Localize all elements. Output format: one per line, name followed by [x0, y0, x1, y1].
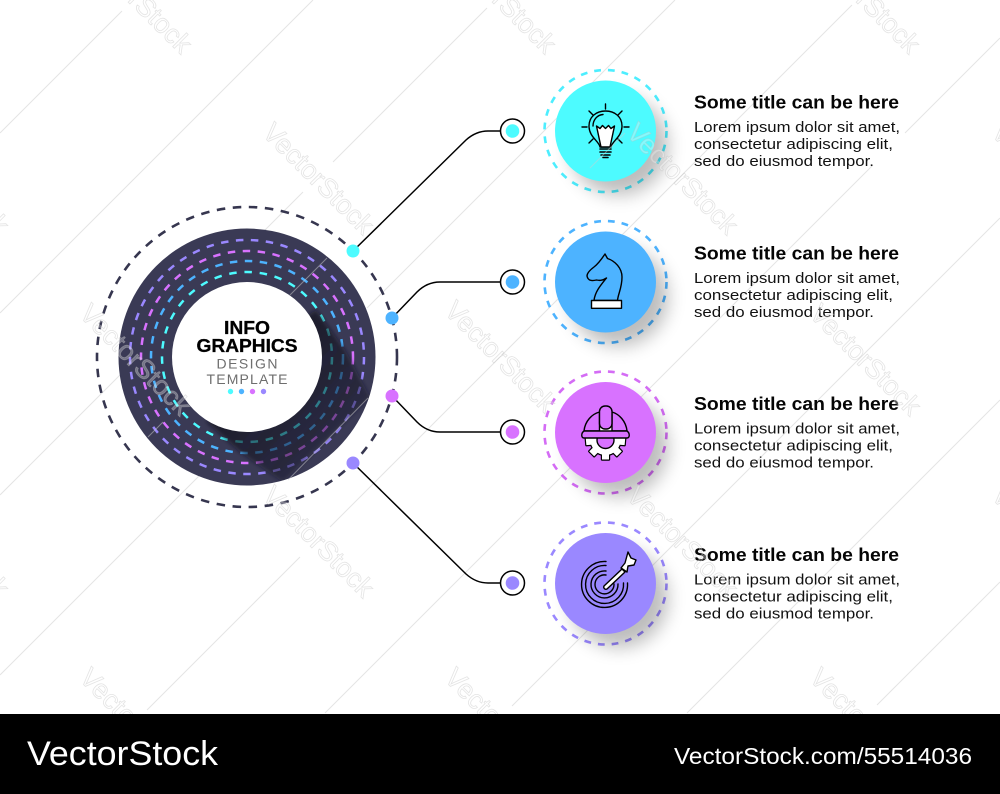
icon: chess knight [587, 254, 622, 308]
dashed cyan ring [162, 272, 332, 442]
icon: target with arrow [582, 552, 636, 607]
footer logo: VectorStock [27, 735, 219, 773]
connector 2 [386, 270, 524, 324]
step 4 text: Lorem ipsum dolor sit amet, [694, 572, 900, 588]
footer bar [0, 714, 1000, 794]
step 4 text: consectetur adipiscing elit, [694, 590, 893, 606]
watermarks: VectorStock [74, 662, 197, 786]
center white disc [172, 282, 322, 432]
step 4 text: Some title can be here [694, 544, 899, 565]
step 3 text: consectetur adipiscing elit, [694, 438, 893, 454]
connector 3 [386, 390, 524, 444]
step 2 text: consectetur adipiscing elit, [694, 288, 893, 304]
dashed pink ring [141, 251, 353, 463]
center color dots [228, 389, 266, 394]
watermarks: VectorStock [621, 117, 744, 241]
step 2 text: Some title can be here [694, 242, 899, 263]
center title [196, 317, 298, 387]
connector 4 [346, 456, 524, 595]
connector 1 [346, 119, 524, 258]
step 1 text: sed do eiusmod tempor. [694, 154, 874, 170]
step 1 text [694, 91, 900, 170]
ring long shadow [207, 310, 370, 482]
step 3 text [694, 393, 900, 472]
step 4 text [694, 544, 900, 622]
center title: INFO [224, 317, 270, 338]
center title: GRAPHICS [196, 335, 298, 356]
step 1 circle [544, 70, 668, 195]
watermarks: VectorStock [439, 295, 562, 419]
step 4 circle [544, 522, 668, 648]
step 1 text: consectetur adipiscing elit, [694, 137, 893, 153]
icon: helmet with gear [582, 406, 629, 460]
step 3 text: Lorem ipsum dolor sit amet, [694, 422, 900, 438]
watermarks: VectorStock [804, 662, 927, 786]
watermarks: VectorStock [74, 298, 197, 422]
dashed blue ring [151, 261, 343, 453]
dashed purple ring [130, 240, 364, 474]
step 1 text: Some title can be here [694, 91, 899, 112]
step 3 text: Some title can be here [694, 393, 899, 414]
step 2 circle [544, 221, 668, 346]
outer dashed circle [97, 207, 397, 507]
central ring diagram [97, 207, 397, 507]
watermarks: VectorStock [439, 662, 562, 786]
watermarks: VectorStock [257, 117, 380, 241]
watermarks: VectorStock [621, 480, 744, 604]
step 1 text: Lorem ipsum dolor sit amet, [694, 120, 900, 136]
dark ring [118, 228, 376, 486]
icon: light bulb [582, 104, 629, 158]
step 3 text: sed do eiusmod tempor. [694, 456, 874, 472]
center title: DESIGN [216, 356, 278, 372]
footer image id: VectorStock.com/55514036 [674, 743, 972, 769]
step 3 circle [544, 372, 668, 496]
step 4 text: sed do eiusmod tempor. [694, 606, 874, 622]
step 2 text [694, 242, 900, 321]
watermarks: VectorStock [804, 298, 927, 422]
step 2 text: sed do eiusmod tempor. [694, 305, 874, 321]
center title: TEMPLATE [206, 371, 288, 387]
watermarks: VectorStock [257, 480, 380, 604]
step 2 text: Lorem ipsum dolor sit amet, [694, 271, 900, 287]
